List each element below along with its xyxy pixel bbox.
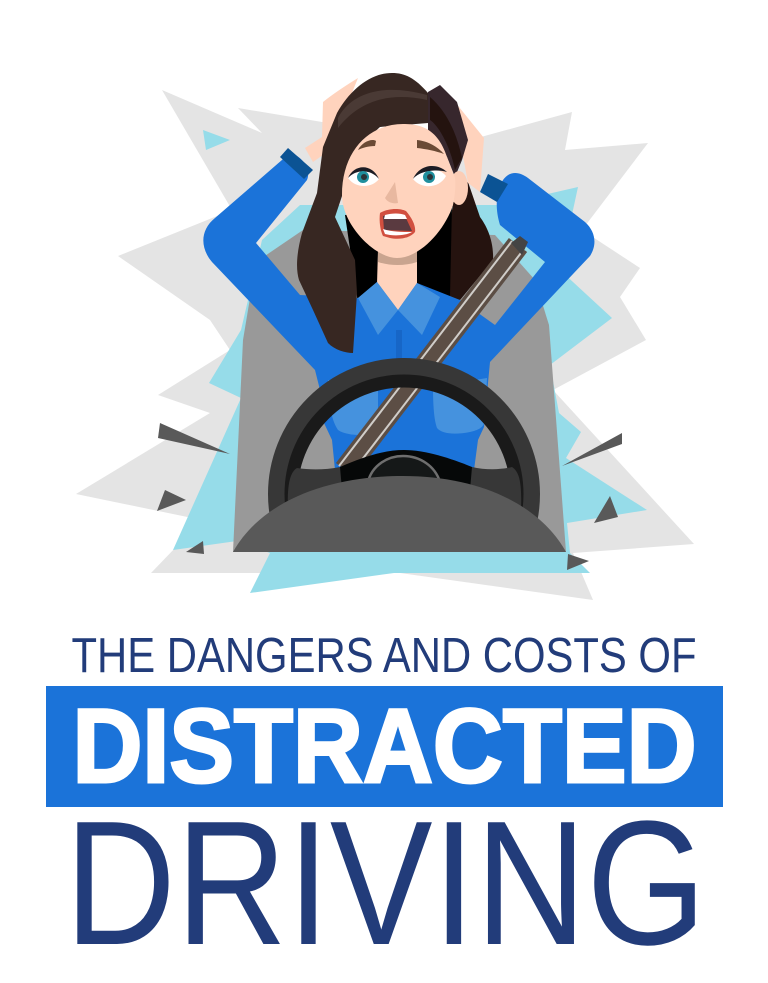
eyebrows [358,140,444,154]
hair right inner strand [430,97,462,170]
title line two: DISTRACTED [72,688,696,805]
car seat [233,230,566,552]
flying shards [157,423,622,570]
hand left [305,78,358,162]
title banner [46,686,723,807]
illustration: panicked driver at the wheel [76,73,694,621]
hair highlight [338,90,427,128]
left eye [348,167,379,186]
right eye [413,166,447,186]
collar [358,282,440,335]
light blue burst [173,187,647,593]
ear [450,171,468,205]
hair, main left mass [297,73,428,353]
steering wheel [268,358,540,518]
shirt pocket left [328,380,378,435]
black hair shadow behind neck [345,205,452,303]
sleeve cuff right [480,174,508,202]
seat belt [339,236,528,474]
instrument arc [368,456,440,482]
neck shadow [378,250,417,265]
neck [377,250,417,312]
blouse placket [396,330,402,360]
wheel hub [340,450,472,490]
back hair, right side [447,182,493,300]
mouth [380,209,415,239]
infographic canvas [46,73,723,946]
sleeve cuff left [280,148,313,179]
wheel spokes [288,467,521,510]
shirt pocket right [433,378,487,434]
grey burst background [76,90,694,600]
blouse and sleeves [203,153,594,470]
face [342,124,455,258]
nose [385,182,398,203]
dashboard [233,476,566,552]
hair right top [428,85,468,177]
heading block [46,628,723,982]
small blue shard [203,130,230,150]
hand right [455,102,484,192]
